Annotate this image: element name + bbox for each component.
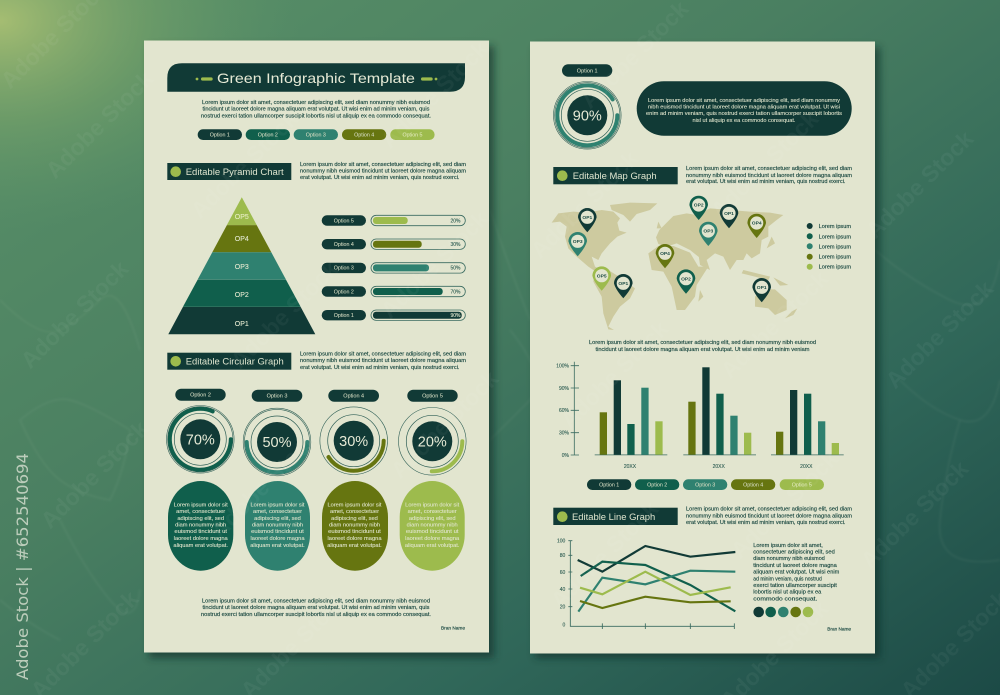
bar: option 5 [322,215,465,226]
bar chart legend: Option 4 [743,482,763,488]
pin: OP2 europe [689,196,708,220]
pin: OP1 australia [752,278,771,302]
map description: erat volutpat. Ut wisi enim ad minim veniam, quis nostrud exerci. [686,179,846,185]
circular gauge: option 4 30%: 30% [339,434,368,450]
heading: line graph: Editable Line Graph [572,512,655,523]
bar chart: 60% [559,408,570,414]
line chart side text [753,543,840,602]
bar: option 5: Option 5 [334,218,354,224]
circular gauge: option 4 30%: Option 4 [343,394,364,400]
line chart: 80 [560,553,566,559]
watermarks: Adobe Stock [880,275,998,393]
bar chart: 30% [559,430,570,436]
intro text: tincidunt ut laoreet dolore magna aliquam erat volutpat. Ut wisi enim ad minim veniam, quis [202,107,430,113]
circular gauge: option 5 20% [398,390,466,475]
page shadows [149,46,880,658]
pin: OP1 australia: OP1 [757,285,767,291]
bar chart description [589,340,816,353]
map legend: Lorem ipsum [819,224,852,230]
text capsule: option 5: Lorem ipsum dolor sit [405,502,460,508]
line graph description: Lorem ipsum dolor sit amet, consectetuer adipiscing elit, sed diam [686,507,853,513]
text capsule: option 2: euismod tincidunt ut [174,529,228,535]
bar: option 1 [322,310,465,320]
callout: nisl ut aliquip ex ea commodo consequat. [692,118,796,124]
text capsule: option 3: Lorem ipsum dolor sit [250,502,305,508]
pin: OP1 russia: OP1 [724,211,734,217]
pyramid description [300,162,467,181]
world map [552,203,797,330]
watermarks: Adobe Stock [225,255,343,373]
watermarks: Adobe Stock [375,205,493,323]
text capsule: option 5: diam nonummy nibh [407,522,458,528]
watermarks: Adobe Stock [35,415,153,533]
pin: OP4 north africa [656,244,674,268]
pin: OP1 south america [614,274,633,298]
text capsule: option 4 [322,481,388,571]
line chart side text: aliquam erat volutpat. Ut wisi enim [753,570,840,576]
text capsule: option 2 [168,481,233,571]
panel: right page [530,42,875,654]
line chart side text: diam nonummy nibh euismod [753,556,825,562]
text capsule: option 3: adipiscing elit, sed [254,516,301,522]
line graph description: erat volutpat. Ut wisi enim ad minim veniam, quis nostrud exerci. [686,520,846,526]
intro text: nostrud exerci tation ullamcorper suscipit lobortis nisl ut aliquip ex ea commodo consequat. [201,114,431,120]
text capsule: option 2: amet, consectetuer [176,509,225,515]
callout: Lorem ipsum dolor sit amet, consectetuer adipiscing elit, sed diam nonummy [648,98,840,104]
pin: OP3 west coast [568,232,587,256]
bar chart description: tincidunt ut laoreet dolore magna aliquam erat volutpat. Ut wisi enim ad minim veniam [596,347,810,353]
bar: option 2: 70% [450,289,461,295]
text capsule: option 3: diam nonummy nibh [252,522,303,528]
panel: left page [144,40,489,652]
watermarks: Adobe Stock [15,255,133,373]
pyramid chart: OP2 [235,292,249,299]
pyramid chart: OP4 [235,236,249,243]
progress bars [322,215,465,320]
text capsule: option 4: Lorem ipsum dolor sit [328,502,382,508]
text capsule: option 3: euismod tincidunt ut [251,529,304,535]
text capsule: option 5: adipiscing elit, sed [409,516,456,522]
map legend: Lorem ipsum [819,265,852,271]
line chart side text: commodo consequat. [753,596,817,602]
bar chart: 20XX [713,464,725,470]
heading: pyramid chart [167,163,291,180]
bar chart legend [587,479,824,490]
pyramid chart: OP1 [235,321,249,328]
pyramid description: Lorem ipsum dolor sit amet, consectetuer adipiscing elit, sed diam [300,162,467,168]
circular graph description: erat volutpat. Ut wisi enim ad minim veniam, quis nostrud exerci. [300,365,460,371]
pin: OP5 central america: OP5 [597,273,607,279]
bar: option 5: 20% [450,218,461,224]
pin: OP1 north america: OP1 [582,215,592,221]
circular gauge: option 1 90% [554,64,621,149]
pin: OP3 central asia: OP3 [703,229,713,235]
pyramid chart: OP3 [235,264,249,271]
circular graph description: Lorem ipsum dolor sit amet, consectetuer adipiscing elit, sed diam [300,352,467,358]
colour dots [753,607,813,617]
circular gauge: option 5 20%: 20% [418,434,447,450]
line chart side text: consectetuer adipiscing elit, sed [753,550,835,556]
closing text: nostrud exerci tation ullamcorper suscipit lobortis nisl ut aliquip ex ea commodo consequat. [201,612,431,618]
closing text: Lorem ipsum dolor sit amet, consectetuer adipiscing elit, sed diam nonummy nibh euismod [202,598,430,604]
bar chart [556,362,844,470]
circular gauge: option 2 70%: Option 2 [190,392,211,398]
bar chart: 20XX [624,464,637,470]
text capsule: option 2: adipiscing elit, sed [177,516,224,522]
map description: nonummy nibh euismod tincidunt ut laoreet dolore magna aliquam [686,173,853,179]
text capsule: option 4: euismod tincidunt ut [328,529,381,535]
intro text: Lorem ipsum dolor sit amet, consectetuer adipiscing elit, sed diam nonummy nibh euismod [202,100,430,106]
bar: option 4 [322,239,465,249]
bar: option 3 [322,263,465,273]
circular gauge: option 1 90%: 90% [573,108,602,124]
pin: OP5 central america [592,266,611,291]
text capsule: option 4: aliquam erat volutpat. [327,543,382,549]
pin: OP1 north america [578,208,597,232]
text capsule: option 2: diam nonummy nibh [175,522,226,528]
callout: enim ad minim veniam, quis nostrud exerci tation ullamcorper suscipit lobortis [646,111,842,117]
brand name: Bran Name [441,625,465,630]
line chart side text: tincidunt ut laoreet dolore magna [753,563,837,569]
pin: OP3 central asia [699,222,718,246]
circular gauge: option 3 50%: Option 3 [267,394,287,400]
text capsule: option 2: aliquam erat volutpat. [173,543,228,549]
text capsule: option 5: aliquam erat volutpat. [405,543,459,549]
line chart side text: Lorem ipsum dolor sit amet, [753,543,823,549]
pyramid description: nonummy nibh euismod tincidunt ut laoreet dolore magna aliquam [300,169,467,175]
bar: option 1: 90% [450,313,461,319]
heading: circular graph: Editable Circular Graph [186,357,284,368]
pin: OP4 east asia [747,214,766,238]
map description: Lorem ipsum dolor sit amet, consectetuer adipiscing elit, sed diam [686,166,853,172]
line chart: 0 [563,622,566,628]
text capsule: option 5: amet, consectetuer [408,509,457,515]
bar: option 4: Option 4 [334,242,354,248]
bar chart: 20XX [800,464,813,470]
watermarks: Adobe Stock [705,105,823,223]
side credit text: Adobe Stock | #652540694 [13,453,32,680]
heading: map graph: Editable Map Graph [573,171,657,182]
circular gauge: option 3 50%: 50% [262,435,292,451]
watermarks: Adobe Stock [855,455,973,573]
bar chart description: Lorem ipsum dolor sit amet, consectetuer adipiscing elit, sed diam nonummy nibh euismod [589,340,816,346]
text capsule: option 4: adipiscing elit, sed [331,516,378,522]
bars: group 1 [600,380,663,455]
bar chart legend: Option 1 [599,482,619,488]
heading: map graph [553,167,678,184]
callout [637,81,852,136]
text capsule: option 4: diam nonummy nibh [329,522,380,528]
title banner: Green Infographic Template [217,70,415,86]
line chart side text: exerci tation ullamcorper suscipit [753,583,837,589]
pin: OP3 west coast: OP3 [573,239,583,245]
pin: OP1 russia [720,204,738,228]
bar: option 2 [322,286,465,297]
closing text [201,598,431,618]
watermarks: Adobe Stock [185,105,303,223]
circular gauge: option 4 30% [320,390,388,475]
circular graph description: nonummy nibh euismod tincidunt ut laoreet dolore magna aliquam [300,358,467,364]
callout: nibh euismod tincidunt ut laoreet dolore magna aliquam erat volutpat. Ut wisi [648,104,840,110]
bar: option 3: Option 3 [334,266,354,272]
text capsule: option 3: amet, consectetuer [253,509,302,515]
map legend [807,223,852,271]
option legend: Option 3 [306,132,326,138]
bar chart: 90% [559,386,570,392]
line chart: 60 [560,570,566,576]
bar chart legend: Option 3 [695,482,715,488]
bar: option 2: Option 2 [334,289,354,295]
text capsule: option 5: euismod tincidunt ut [406,529,459,535]
option legend [198,129,435,140]
bars: group 3 [776,390,839,455]
pin: OP4 north africa: OP4 [660,251,670,257]
bar chart: 100% [556,364,570,370]
text capsule: option 2: Lorem ipsum dolor sit [174,502,228,508]
watermarks: Adobe Stock [545,495,663,613]
map legend: Lorem ipsum [819,255,852,261]
text capsule: option 2: laoreet dolore magna [174,536,228,542]
line chart side text: ad minim veniam, quis nostrud [753,576,822,582]
option legend: Option 5 [402,132,423,138]
option legend: Option 2 [258,132,278,138]
watermarks: Adobe Stock [860,125,978,243]
pyramid description: erat volutpat. Ut wisi enim ad minim veniam, quis nostrud exerci. [300,175,460,181]
text capsule: option 3: laoreet dolore magna [250,536,305,542]
text capsule: option 3 [245,481,310,571]
watermarks: Adobe Stock [205,425,323,543]
pin: OP2 central africa: OP2 [681,276,691,282]
circular gauge: option 3 50% [243,390,311,476]
circular gauge: option 2 70% [166,389,234,473]
map legend: Lorem ipsum [819,244,852,250]
text capsule: option 5: laoreet dolore magna [405,536,459,542]
watermarks: Adobe Stock [715,265,833,383]
title banner [167,63,465,92]
map description [686,166,853,185]
pin: OP1 south america: OP1 [618,281,628,287]
pin: OP2 central africa [677,269,695,294]
line chart: 100 [557,538,566,544]
bar: option 3: 50% [450,266,461,272]
circular graph description [300,352,467,371]
heading: pyramid chart: Editable Pyramid Chart [186,167,284,178]
line chart: 40 [560,587,566,593]
pin: OP2 europe: OP2 [694,203,704,209]
line chart [557,538,735,629]
line chart side text: lobortis nisl ut aliquip ex ea [753,590,821,596]
heading: line graph [553,508,678,525]
text capsule: option 5 [400,481,465,571]
option legend: Option 4 [354,132,374,138]
bar chart: 0% [562,453,570,459]
pin: OP4 east asia: OP4 [752,221,762,227]
closing text: tincidunt ut laoreet dolore magna aliquam erat volutpat. Ut wisi enim ad minim veniam, quis [202,605,430,611]
watermarks: Adobe Stock [375,35,493,153]
pyramid chart: OP5 [235,214,249,221]
watermarks: Adobe Stock [385,365,503,483]
brand name: Bran Name [827,626,851,631]
pyramid chart [168,197,315,334]
text capsule: option 3: aliquam erat volutpat. [250,543,305,549]
bar: option 1: Option 1 [334,313,354,319]
bar chart legend: Option 5 [792,482,812,488]
watermarks: Adobe Stock [525,145,643,263]
watermarks: Adobe Stock [725,445,843,563]
map legend: Lorem ipsum [819,234,852,240]
intro text [201,100,431,120]
line chart: 20 [560,604,566,610]
watermarks: Adobe Stock [40,65,158,183]
circular gauge: option 1 90%: Option 1 [577,68,598,74]
map pins [568,196,771,302]
text capsule: option 4: laoreet dolore magna [328,536,382,542]
line graph description [686,507,853,526]
heading: circular graph [167,353,291,370]
bar: option 4: 30% [450,242,461,248]
option legend: Option 1 [210,132,230,138]
line graph description: nonummy nibh euismod tincidunt ut laoreet dolore magna aliquam [686,513,853,519]
watermarks: Adobe Stock [555,315,673,433]
circular gauge: option 2 70%: 70% [186,432,215,448]
bars: group 2 [688,367,751,455]
text capsule: option 4: amet, consectetuer [330,509,379,515]
bar chart legend: Option 2 [647,482,667,488]
circular gauge: option 5 20%: Option 5 [422,394,443,400]
